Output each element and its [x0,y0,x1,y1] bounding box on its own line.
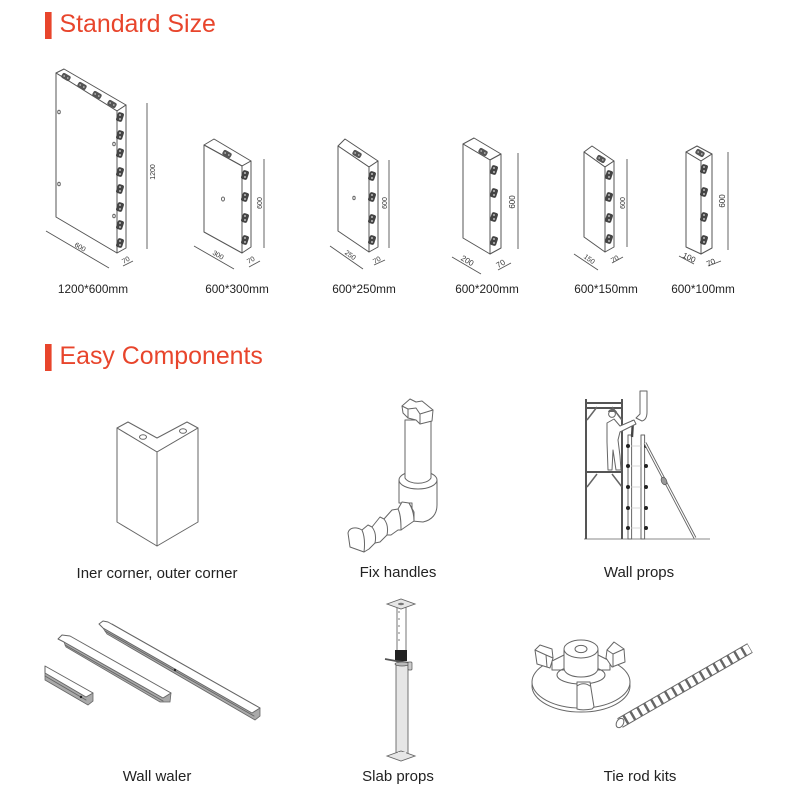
component: wall props [584,391,710,581]
panel: 1200*600mm [46,69,157,296]
panel: 600*300mm [194,139,269,296]
component: slab props: Slab props [362,768,434,785]
panel: 600*150mm: 600*150mm [574,282,638,296]
panel: 600*150mm: 600 [620,197,627,209]
panel: 600*300mm: 600*300mm [205,282,269,296]
panel: 1200*600mm: 1200*600mm [58,282,128,296]
panel: 1200*600mm: 600 [73,242,87,254]
component: tie rod kits: Tie rod kits [604,768,676,785]
component: fix handles: Fix handles [360,564,436,581]
heading: Easy Components: Easy Components [60,342,263,370]
component: fix handles [348,399,437,581]
panel: 1200*600mm: 1200 [150,164,157,180]
component: inner and outer corner [77,422,237,582]
panel: 600*100mm: 600*100mm [671,282,735,296]
panel: 600*250mm: 600 [382,197,389,209]
panel: 600*300mm: 70 [246,256,256,266]
panel: 600*300mm: 300 [211,250,225,262]
panel: 600*250mm [330,139,396,296]
panel: 600*150mm: 70 [610,255,620,265]
component: wall waler: Wall waler [123,768,191,785]
component: tie rod kits [532,640,750,785]
component: inner and outer corner: Iner corner, outer corner [77,565,237,582]
panel: 600*100mm: 100 [681,251,698,265]
panel: 600*250mm: 250 [343,250,357,262]
panel: 600*200mm: 70 [495,257,507,270]
panel: 600*250mm: 70 [372,256,382,266]
panel: 600*200mm [452,138,519,296]
panel: 600*200mm: 200 [459,254,476,268]
panel: 600*200mm: 600 [508,195,517,209]
component: slab props [362,599,434,785]
panel: 600*200mm: 600*200mm [455,282,519,296]
panel: 600*100mm: 600 [718,194,727,208]
panel: 600*250mm: 600*250mm [332,282,396,296]
component: wall waler [45,621,260,785]
panel: 600*100mm [671,146,735,296]
panel: 600*150mm: 150 [582,254,596,266]
panel: 600*300mm: 600 [257,197,264,209]
panel: 1200*600mm: 70 [121,256,131,266]
panel: 600*100mm: 70 [705,257,717,269]
component: wall props: Wall props [604,564,674,581]
panel: 600*150mm [574,146,638,296]
heading: Standard Size: Standard Size [60,10,216,38]
